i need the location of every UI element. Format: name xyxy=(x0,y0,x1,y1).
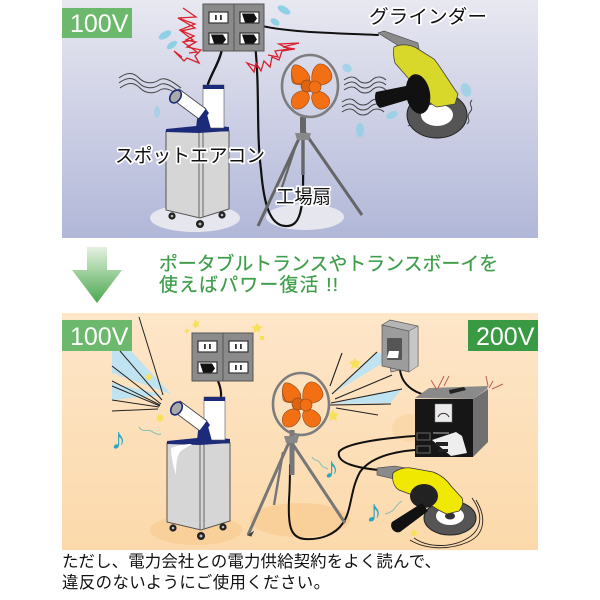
icon: music notes: ♪ xyxy=(366,493,382,529)
message text: ポータブルトランスやトランスボーイを xyxy=(159,252,498,274)
icon: spot air conditioner xyxy=(167,397,230,540)
icon: alert ticks xyxy=(431,376,503,390)
icon: wall outlets xyxy=(203,4,264,51)
panel: 100V overloaded circuit xyxy=(62,0,538,238)
100V label: 100V xyxy=(70,323,129,351)
icon: sparkles xyxy=(146,319,417,536)
label: factory fan: 工場扇 xyxy=(276,186,331,208)
icon: factory fan xyxy=(248,373,345,536)
icon: spot air conditioner xyxy=(166,85,229,228)
message text: 使えばパワー復活 !! xyxy=(159,274,338,295)
icon: cool air streams right xyxy=(330,352,402,415)
icon: portable transformer xyxy=(415,386,488,457)
message text xyxy=(159,252,498,295)
icon: heat waves xyxy=(119,74,472,135)
power cords xyxy=(211,362,425,539)
icon: breeze lines xyxy=(139,427,402,514)
floor shadows xyxy=(150,204,344,232)
label: grinder: グラインダー xyxy=(369,6,487,28)
panel: with transformer xyxy=(62,313,538,550)
icon: grinder xyxy=(375,31,467,138)
icon: music notes: ♪ xyxy=(111,423,126,456)
icon: music notes: ♪ xyxy=(324,452,339,485)
icon: red overload sparks xyxy=(174,8,299,72)
icon: wall outlets xyxy=(192,333,253,381)
label: spot air conditioner: スポットエアコン xyxy=(115,145,265,167)
icon: switch box xyxy=(382,320,418,372)
footnote text xyxy=(62,553,441,592)
icon: factory fan xyxy=(258,55,362,226)
icon: water drops xyxy=(154,3,473,137)
200V label: 200V xyxy=(476,323,535,351)
icon: music notes xyxy=(111,423,382,529)
100V label: 100V xyxy=(70,10,129,38)
icon: grinder xyxy=(377,466,483,548)
icon: cool air streams left xyxy=(112,317,171,411)
footnote text: ただし、電力会社との電力供給契約をよく読んで、 xyxy=(62,553,441,571)
footnote text: 違反のないようにご使用ください。 xyxy=(62,574,330,592)
arrow: down xyxy=(72,247,122,303)
power cords xyxy=(208,23,378,226)
floor shadows xyxy=(150,414,428,545)
